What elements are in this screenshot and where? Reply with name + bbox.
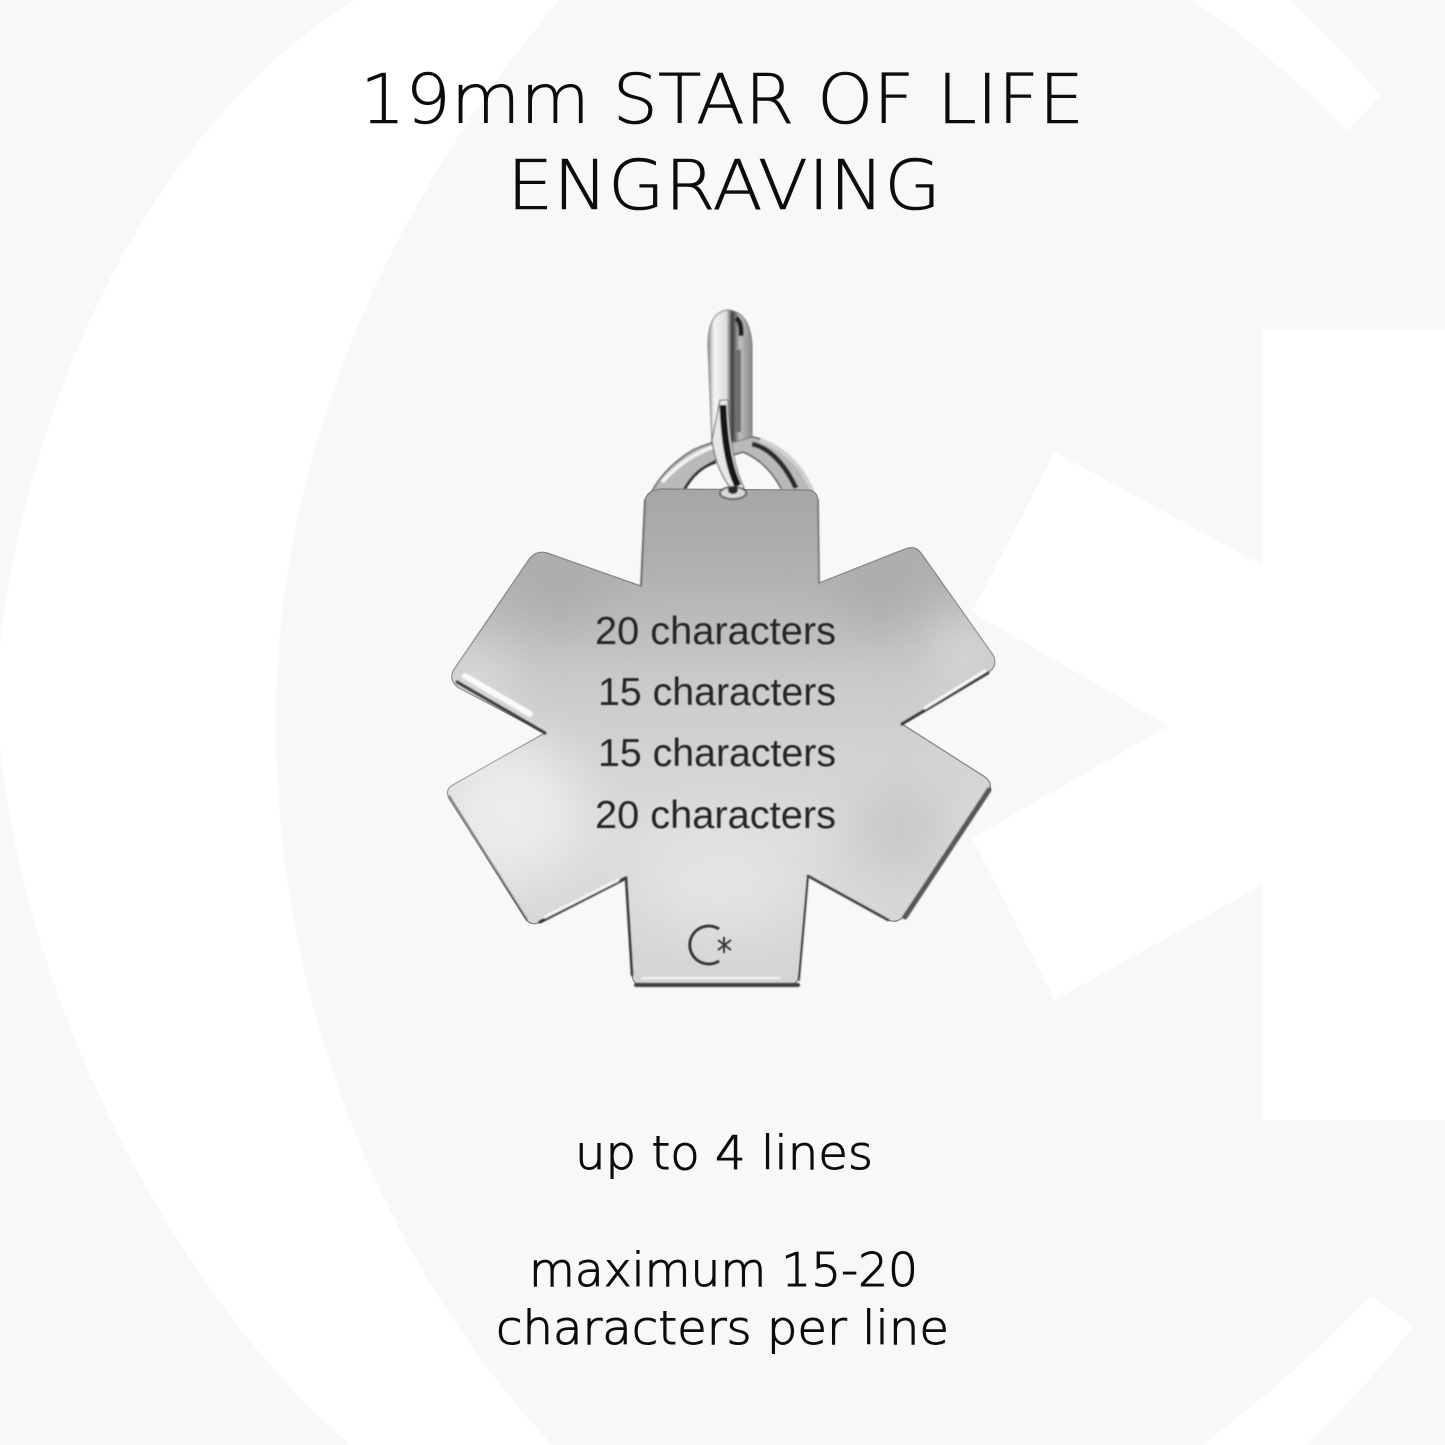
pendant edge shading [449,500,989,985]
title: 19mm STAR OF LIFE [360,60,1084,140]
engraving details: characters per line [496,1301,949,1355]
engraving details: maximum 15-20 [529,1243,918,1297]
title [360,60,1084,226]
pendant bail [648,437,817,500]
pendant [440,310,995,985]
title: ENGRAVING [507,146,941,226]
pendant engraved text: 20 characters [595,794,836,837]
pendant maker mark [690,926,731,964]
pendant engraved text: 15 characters [598,732,836,775]
pendant jump ring [708,310,752,499]
pendant engraved text: 20 characters [595,610,836,653]
engraving details: up to 4 lines [575,1126,873,1180]
pendant engraved text [595,610,836,837]
pendant engraved text: 15 characters [598,671,836,714]
pendant star body [440,489,995,985]
engraving details [496,1126,949,1355]
